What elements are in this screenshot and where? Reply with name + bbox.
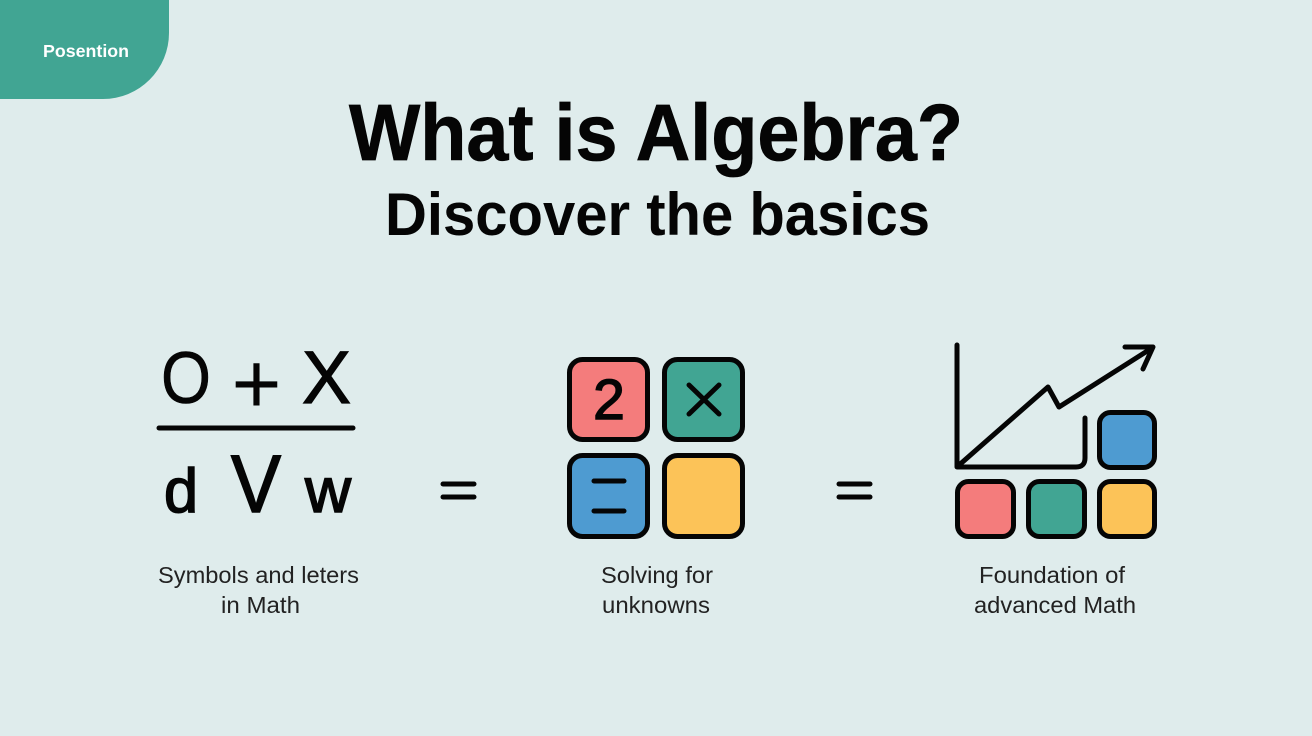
badge: Posention [0,0,169,99]
tile: equals [570,456,648,536]
tile: number 2: 2 [593,368,625,432]
caption: foundation of advanced math: Foundation of [979,562,1126,588]
icon: equals sign [839,484,870,497]
panel: foundation of advanced math [957,345,1154,618]
subtitle: Discover the basics [385,181,930,248]
block: yellow [1100,482,1154,536]
block: blue [1100,412,1154,468]
panel: solving for unknowns [570,360,742,618]
badge: Posention: Posention [43,41,129,61]
fraction numerator [161,336,351,432]
panel: symbols and letters [158,336,359,618]
fraction numerator: O [161,338,211,419]
title: What is Algebra? [349,88,963,177]
chart: rising trend line [957,345,1153,467]
fraction denominator: w [304,456,352,526]
block: red [958,482,1014,536]
fraction numerator: X [302,336,351,419]
icon: equals sign [443,484,474,497]
fraction numerator: + [232,336,282,432]
fraction denominator: V [231,439,281,530]
caption: solving for unknowns: Solving for [601,562,713,588]
fraction bar [159,426,353,430]
fraction denominator: d [164,457,198,526]
caption: symbols and letters: Symbols and leters [158,562,359,588]
tile: number 2 [570,360,648,440]
tile: multiply [664,360,742,440]
caption: symbols and letters: in Math [221,592,300,618]
block: green [1028,482,1084,536]
caption: foundation of advanced math: advanced Math [974,592,1136,618]
fraction denominator [164,439,352,530]
tile: blank yellow [664,456,742,536]
caption: solving for unknowns: unknowns [602,592,710,618]
